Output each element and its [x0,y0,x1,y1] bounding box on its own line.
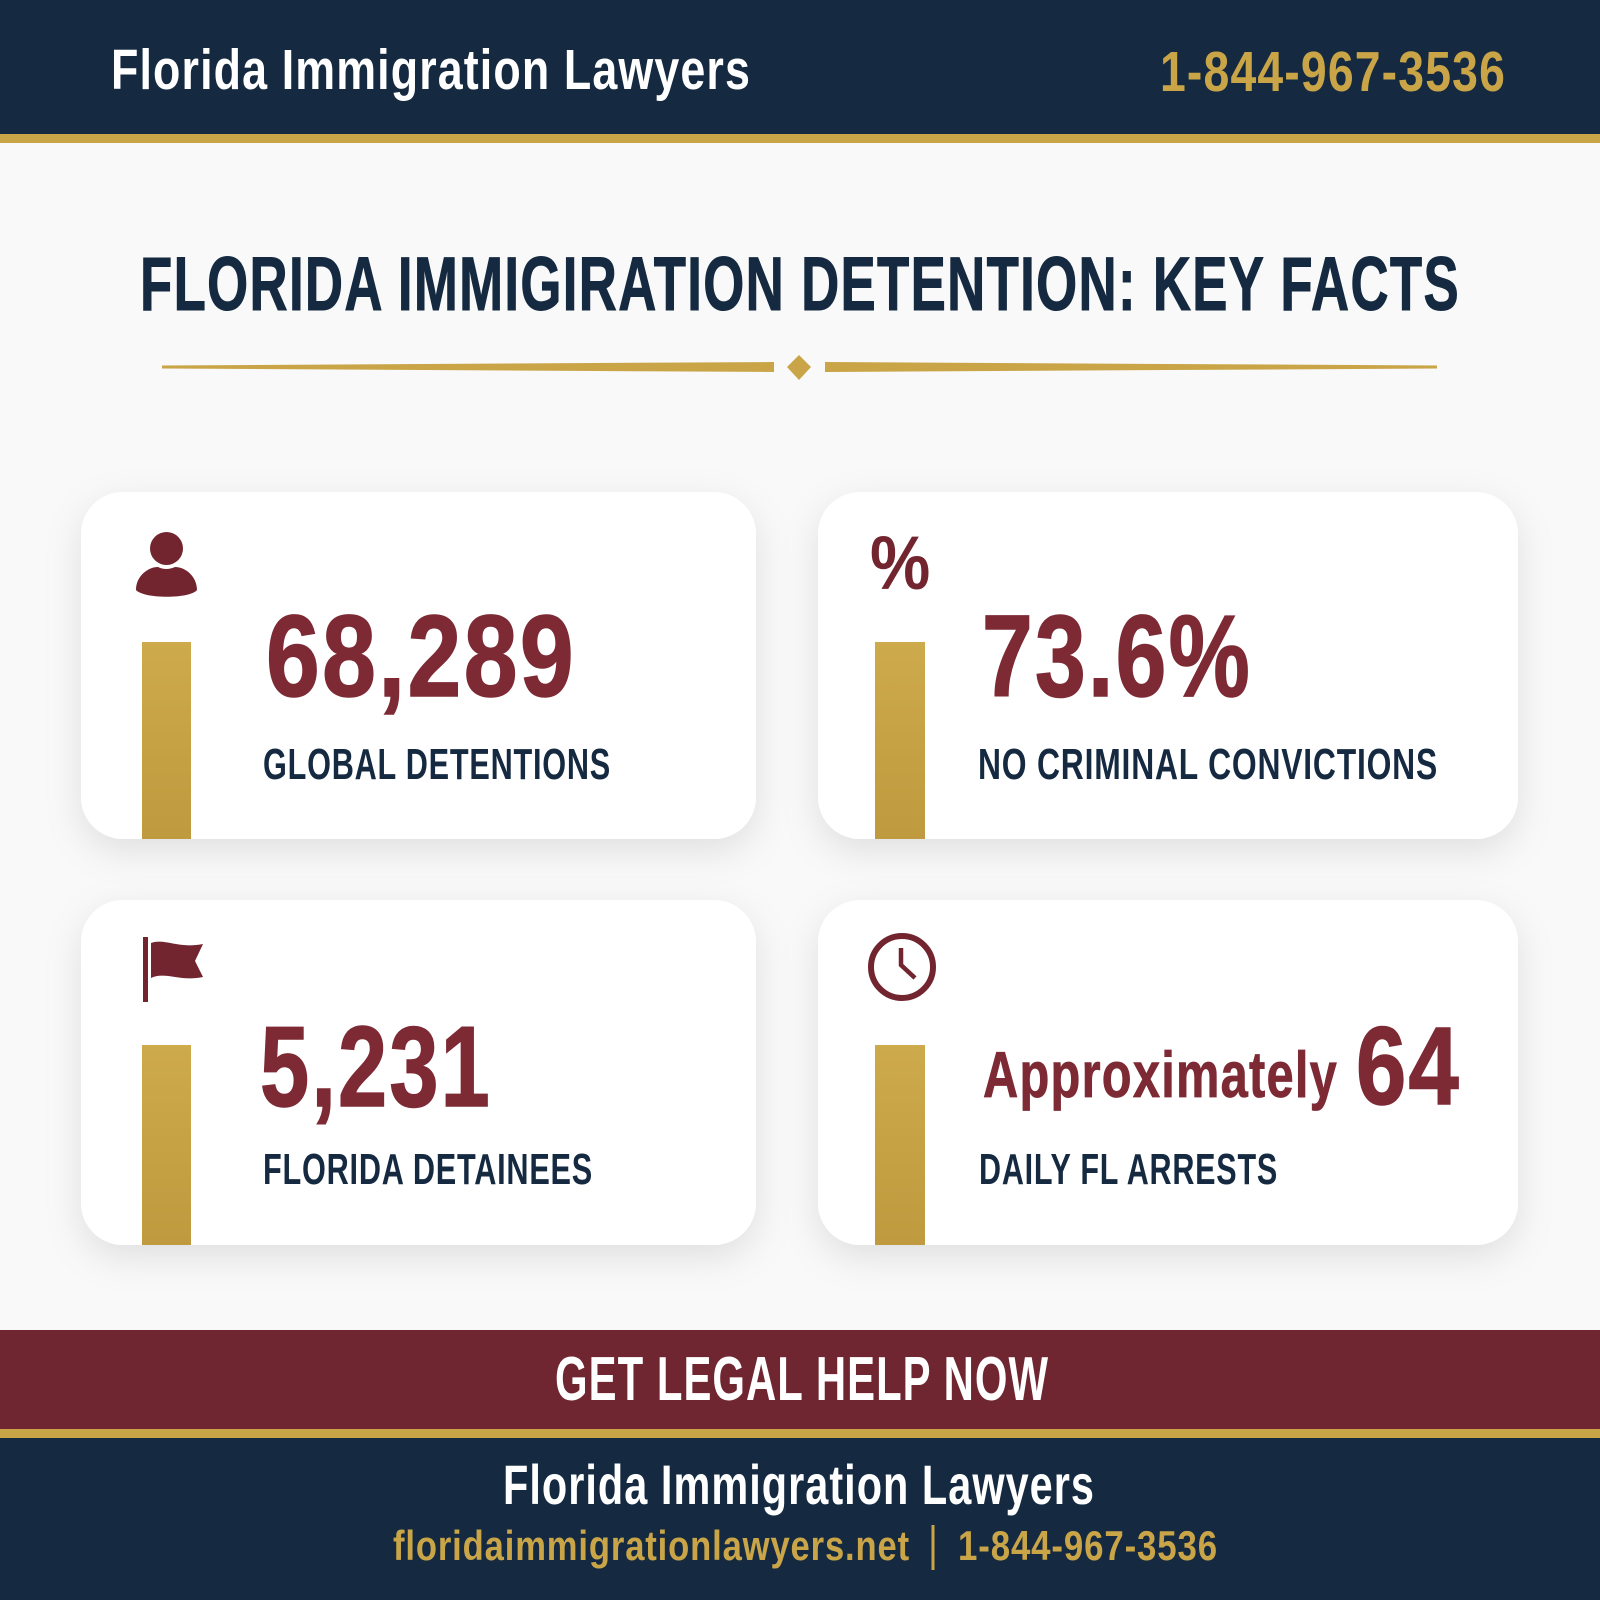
stat label: DAILY FL ARRESTS [979,1145,1278,1194]
stat number: Approximately [983,1038,1338,1111]
footer website: floridaimmigrationlawyers.net [393,1522,910,1569]
gold bar [142,1045,191,1245]
stat number [983,1005,1461,1128]
footer phone number: 1-844-967-3536 [958,1522,1218,1569]
header bar [0,0,1600,143]
icon: person [136,532,197,597]
stat number: 64 [1356,1005,1461,1128]
icon: percent: % [870,521,932,606]
stat label: NO CRIMINAL CONVICTIONS [978,740,1438,789]
stat label: GLOBAL DETENTIONS [263,740,611,789]
icon: flag [143,937,203,1002]
gold bar [875,1045,925,1245]
call to action banner [0,1330,1600,1429]
header firm name: Florida Immigration Lawyers [111,38,751,102]
panel: global detentions [81,492,756,839]
title divider [162,355,1437,380]
footer [0,1429,1600,1600]
footer separator [932,1525,934,1570]
panel: florida detainees [81,900,756,1245]
header phone number: 1-844-967-3536 [1160,40,1506,104]
stat number: 5,231 [260,1004,492,1131]
gold bar [875,642,925,839]
stat label: FLORIDA DETAINEES [263,1145,593,1194]
stat number: 73.6% [982,591,1252,721]
stat number: 68,289 [266,591,576,721]
icon: clock [871,936,933,998]
banner text: GET LEGAL HELP NOW [555,1345,1049,1414]
panel: daily fl arrests [818,900,1518,1245]
footer firm name: Florida Immigration Lawyers [503,1453,1095,1516]
gold bar [142,642,191,839]
panel: no criminal convictions [818,492,1518,839]
